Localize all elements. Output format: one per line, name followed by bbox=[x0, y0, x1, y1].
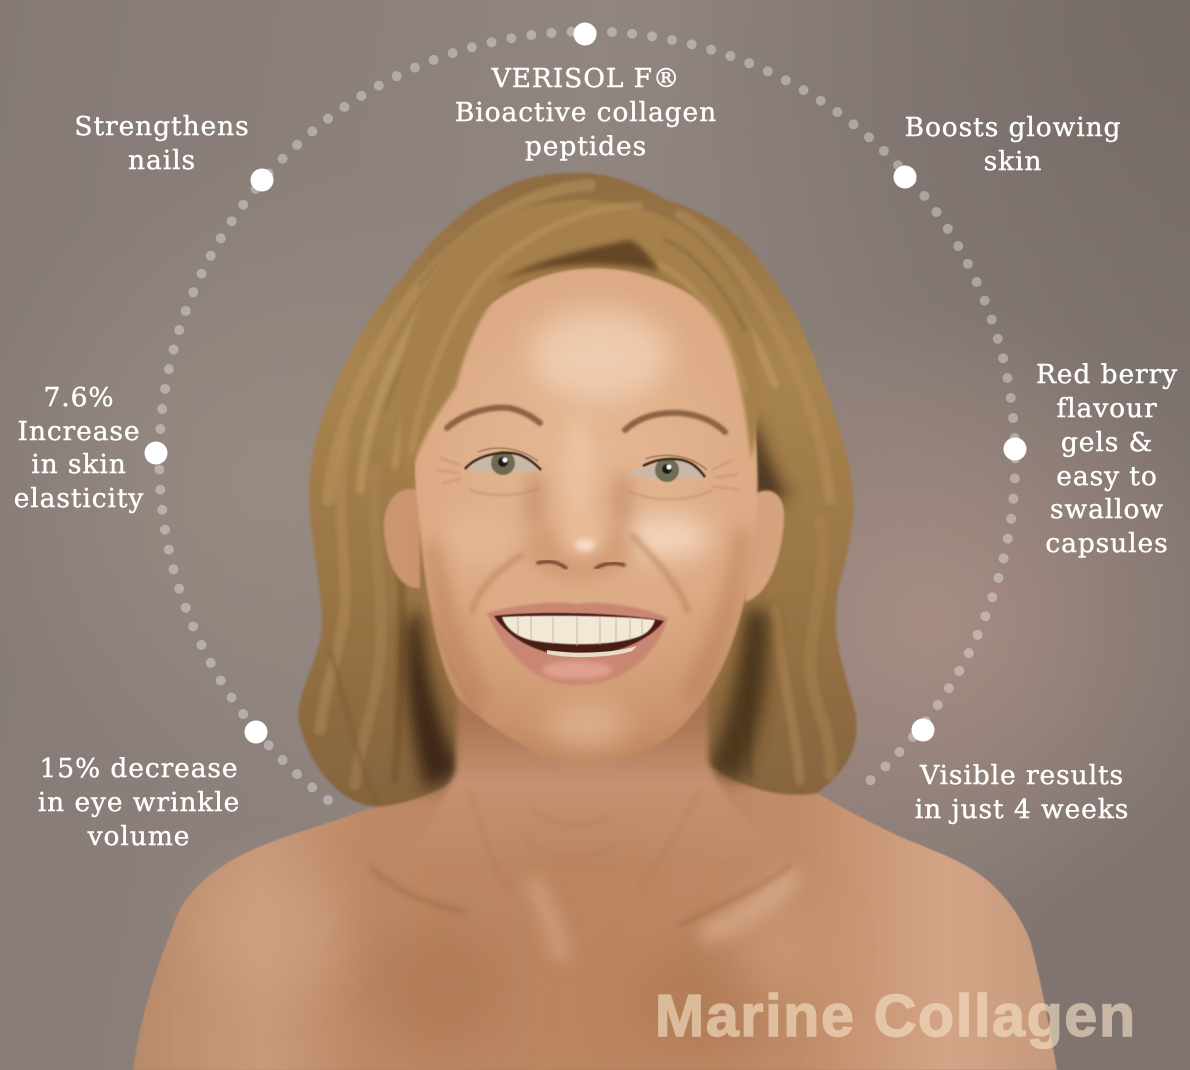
label: red berry flavour: capsules bbox=[1045, 528, 1169, 559]
marker dots bbox=[144, 22, 1026, 744]
collarbones bbox=[372, 865, 790, 925]
shoulders and chest bbox=[133, 760, 1057, 1070]
nose bbox=[526, 513, 632, 582]
brand wordmark: Marine Collagen bbox=[655, 983, 1135, 1049]
label: Verisol F bbox=[455, 63, 717, 162]
label: boosts glowing skin: skin bbox=[984, 146, 1042, 177]
dotted circle bbox=[159, 31, 1015, 800]
label: visible results: in just 4 weeks bbox=[915, 794, 1129, 825]
label: red berry flavour: gels & bbox=[1061, 427, 1153, 458]
label: red berry flavour: Red berry bbox=[1036, 359, 1178, 390]
label: skin elasticity: 7.6% bbox=[44, 382, 114, 413]
smile lines bbox=[425, 535, 688, 715]
label: strengthens nails: Strengthens bbox=[74, 111, 250, 142]
hair strands bbox=[320, 185, 831, 800]
label: Verisol F: VERISOL F® bbox=[491, 63, 680, 94]
label: red berry flavour: swallow bbox=[1050, 494, 1164, 525]
label: Verisol F: Bioactive collagen bbox=[455, 97, 717, 128]
face bbox=[415, 268, 758, 763]
label: strengthens nails bbox=[74, 111, 250, 176]
right eye bbox=[627, 455, 707, 482]
label: Verisol F: peptides bbox=[525, 131, 647, 162]
chest highlights bbox=[525, 860, 800, 960]
label: visible results bbox=[915, 760, 1129, 825]
wrinkles and under-eye lines bbox=[436, 458, 740, 499]
label: visible results: Visible results bbox=[919, 760, 1124, 791]
dark hair at parting bbox=[500, 240, 660, 282]
dark hair near neck bbox=[406, 420, 790, 790]
label: eye wrinkle volume: 15% decrease bbox=[39, 753, 239, 784]
label: skin elasticity bbox=[14, 382, 144, 514]
neck creases bbox=[470, 790, 700, 890]
label: eye wrinkle volume bbox=[38, 753, 240, 852]
cheek and temple shading bbox=[425, 470, 750, 710]
label: eye wrinkle volume: volume bbox=[87, 821, 190, 852]
neck bbox=[400, 690, 790, 860]
label: skin elasticity: Increase bbox=[17, 416, 141, 447]
hairline overlay bbox=[399, 200, 759, 480]
label: boosts glowing skin bbox=[905, 112, 1121, 177]
hair back bbox=[298, 173, 857, 807]
eyebrows bbox=[447, 408, 725, 432]
label: skin elasticity: in skin bbox=[31, 449, 127, 480]
facial highlights bbox=[439, 310, 711, 747]
label: eye wrinkle volume: in eye wrinkle bbox=[38, 787, 240, 818]
hairline strands bbox=[412, 205, 745, 450]
label: boosts glowing skin: Boosts glowing bbox=[905, 112, 1121, 143]
portrait of smiling woman bbox=[133, 173, 1057, 1070]
ear left bbox=[384, 489, 420, 588]
label: red berry flavour bbox=[1036, 359, 1178, 559]
mouth bbox=[487, 602, 668, 685]
arm highlights bbox=[200, 870, 825, 1000]
label: red berry flavour: flavour bbox=[1056, 393, 1158, 424]
label: strengthens nails: nails bbox=[128, 145, 196, 176]
left eye bbox=[465, 448, 541, 475]
chest shading bbox=[370, 915, 770, 1060]
nose bridge highlight bbox=[564, 415, 592, 525]
ear right bbox=[745, 490, 784, 602]
label: skin elasticity: elasticity bbox=[14, 483, 144, 514]
label: red berry flavour: easy to bbox=[1056, 461, 1158, 492]
